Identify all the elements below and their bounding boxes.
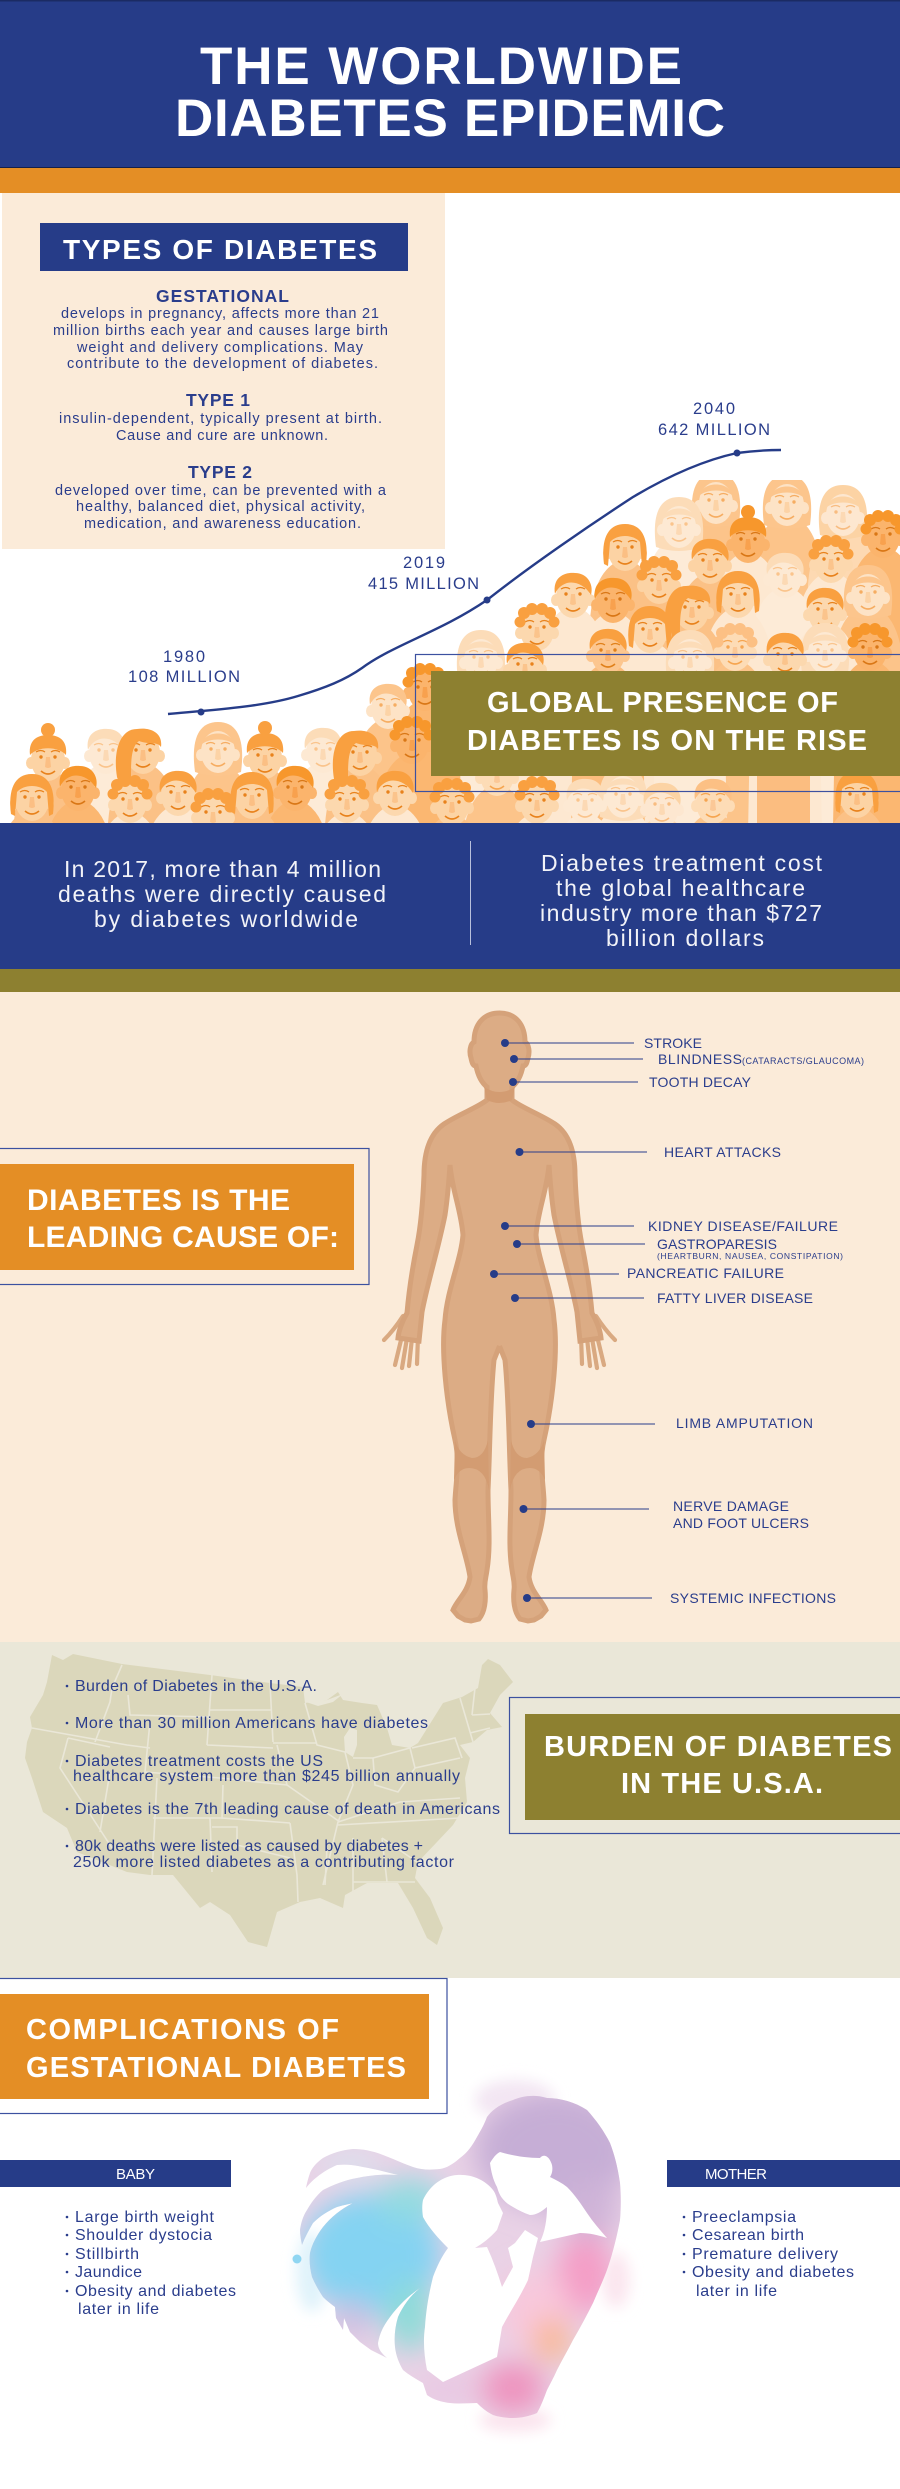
text block: type 2: [55, 462, 387, 532]
illustration: mother and baby watercolor silhouette: [290, 2080, 640, 2432]
text block: gestational: GESTATIONAL: [156, 286, 289, 306]
condition labels: STROKE: [644, 1035, 702, 1051]
text block: gestational: develops in pregnancy, affects more than 21: [61, 306, 379, 322]
label: 1980: 108 MILLION: [128, 668, 240, 686]
label: 2040: 2040: [693, 400, 735, 418]
mother list: Preeclampsia: [692, 2209, 796, 2226]
text block: gestational: million births each year and causes large birth: [53, 323, 388, 339]
panel: leading cause of: [0, 992, 900, 1642]
heading: types of diabetes: [40, 223, 408, 271]
stat: cost: billion dollars: [606, 925, 764, 951]
bullet list: 250k more listed diabetes as a contributing factor: [73, 1854, 455, 1871]
column: mother complications: MOTHER: [705, 2166, 767, 2183]
bullet list: Burden of Diabetes in the U.S.A.: [75, 1678, 317, 1695]
crowd of people: [0, 473, 900, 1155]
condition labels: PANCREATIC FAILURE: [627, 1265, 784, 1281]
text block: type 2: medication, and awareness education.: [84, 516, 361, 532]
text block: gestational: [53, 286, 388, 372]
stat: deaths: deaths were directly caused: [58, 881, 386, 907]
mother list: [683, 2209, 854, 2300]
leader lines and dots: [490, 1039, 655, 1602]
line chart: global diabetes growth: [128, 400, 781, 716]
stat: deaths: In 2017, more than 4 million: [64, 856, 381, 882]
label: 2019: 2019: [403, 554, 445, 572]
text block: gestational: weight and delivery complications. May: [76, 340, 364, 356]
text block: type 1: Cause and cure are unknown.: [116, 428, 328, 444]
label: 1980: [128, 648, 240, 686]
olive divider band: [0, 969, 900, 992]
mother list: Obesity and diabetes: [692, 2264, 854, 2281]
baby list: Shoulder dystocia: [75, 2227, 212, 2244]
callout: burden of diabetes: BURDEN OF DIABETES: [544, 1731, 892, 1763]
baby list: later in life: [78, 2301, 159, 2318]
stat: cost: industry more than $727: [540, 900, 822, 926]
baby list: Large birth weight: [75, 2209, 215, 2226]
condition labels: LIMB AMPUTATION: [676, 1415, 813, 1431]
column: baby complications: BABY: [116, 2166, 155, 2183]
panel: global statistics: [0, 823, 900, 969]
condition labels: BLINDNESS: [658, 1051, 742, 1067]
condition labels: KIDNEY DISEASE/FAILURE: [648, 1218, 838, 1234]
stat: deaths: [58, 856, 386, 932]
title: THE WORLDWIDE: [200, 37, 682, 96]
label: 2019: [368, 554, 479, 593]
title: DIABETES EPIDEMIC: [175, 89, 725, 148]
mother list: later in life: [696, 2283, 777, 2300]
condition labels: AND FOOT ULCERS: [673, 1515, 809, 1531]
mother face and neck silhouette: [490, 2152, 607, 2242]
bullet list: [66, 1678, 500, 1871]
callout: burden of diabetes: IN THE U.S.A.: [621, 1768, 823, 1800]
text block: gestational: contribute to the development of diabetes.: [67, 356, 378, 372]
condition labels: (CATARACTS/GLAUCOMA): [742, 1056, 864, 1066]
callout: complications of gestational diabetes: GESTATIONAL DIABETES: [26, 2052, 406, 2084]
baby list: Obesity and diabetes: [75, 2283, 236, 2300]
baby silhouette: [422, 2175, 538, 2382]
text block: type 2: TYPE 2: [188, 462, 252, 482]
human body figure: [384, 1013, 615, 1621]
mother list: Premature delivery: [692, 2246, 838, 2263]
condition labels: FATTY LIVER DISEASE: [657, 1290, 813, 1306]
stat: cost: [540, 850, 823, 951]
label: 1980: 1980: [163, 648, 205, 666]
baby list: [66, 2209, 236, 2318]
condition labels: (HEARTBURN, NAUSEA, CONSTIPATION): [657, 1251, 843, 1261]
condition labels: TOOTH DECAY: [649, 1074, 752, 1090]
title: [175, 37, 725, 148]
column: baby complications: [0, 2160, 236, 2318]
callout: global presence: GLOBAL PRESENCE OF: [487, 687, 838, 719]
text block: type 2: healthy, balanced diet, physical activity,: [76, 499, 365, 515]
stat: cost: the global healthcare: [556, 875, 805, 901]
condition labels: GASTROPARESIS: [657, 1236, 777, 1252]
stat: deaths: by diabetes worldwide: [94, 906, 358, 932]
mother list: Cesarean birth: [692, 2227, 804, 2244]
label: 2040: 642 MILLION: [658, 421, 770, 439]
callout: global presence: DIABETES IS ON THE RISE: [467, 725, 867, 757]
callout: burden of diabetes: [510, 1698, 900, 1834]
condition labels: SYSTEMIC INFECTIONS: [670, 1590, 836, 1606]
callout: diabetes is the leading cause: [0, 1148, 369, 1284]
text block: type 1: [59, 390, 382, 444]
bullet list: Diabetes treatment costs the US: [75, 1753, 323, 1770]
text block: type 2: developed over time, can be prevented with a: [55, 483, 387, 499]
label: 2019: 415 MILLION: [368, 575, 479, 593]
condition labels: NERVE DAMAGE: [673, 1498, 789, 1514]
callout: diabetes is the leading cause: LEADING CAUSE OF:: [27, 1221, 339, 1254]
condition labels: HEART ATTACKS: [664, 1144, 781, 1160]
bullet list: Diabetes is the 7th leading cause of death in Americans: [75, 1801, 500, 1818]
column: mother complications: [667, 2160, 900, 2300]
heading: types of diabetes: TYPES OF DIABETES: [63, 234, 377, 265]
text block: type 1: TYPE 1: [186, 390, 250, 410]
callout: diabetes is the leading cause: DIABETES IS THE: [27, 1184, 290, 1217]
panel: types of diabetes: [2, 193, 445, 549]
callout: complications of gestational diabetes: COMPLICATIONS OF: [26, 2014, 339, 2046]
bullet list: More than 30 million Americans have diabetes: [75, 1715, 428, 1732]
callout: global presence: [416, 654, 900, 792]
condition labels: [627, 1035, 864, 1606]
callout: complications of gestational diabetes: [0, 1978, 447, 2114]
orange divider band: [0, 168, 900, 193]
map of the USA: [25, 1654, 513, 1947]
header banner: [0, 0, 900, 168]
baby list: Stillbirth: [75, 2246, 139, 2263]
bullet list: 80k deaths were listed as caused by diabetes +: [75, 1838, 423, 1855]
baby list: Jaundice: [75, 2264, 142, 2281]
panel: burden in the USA: [0, 1642, 900, 1978]
bullet list: healthcare system more than $245 billion annually: [73, 1768, 460, 1785]
text block: type 1: insulin-dependent, typically present at birth.: [59, 411, 382, 427]
label: 2040: [658, 400, 770, 439]
stat: cost: Diabetes treatment cost: [541, 850, 823, 876]
